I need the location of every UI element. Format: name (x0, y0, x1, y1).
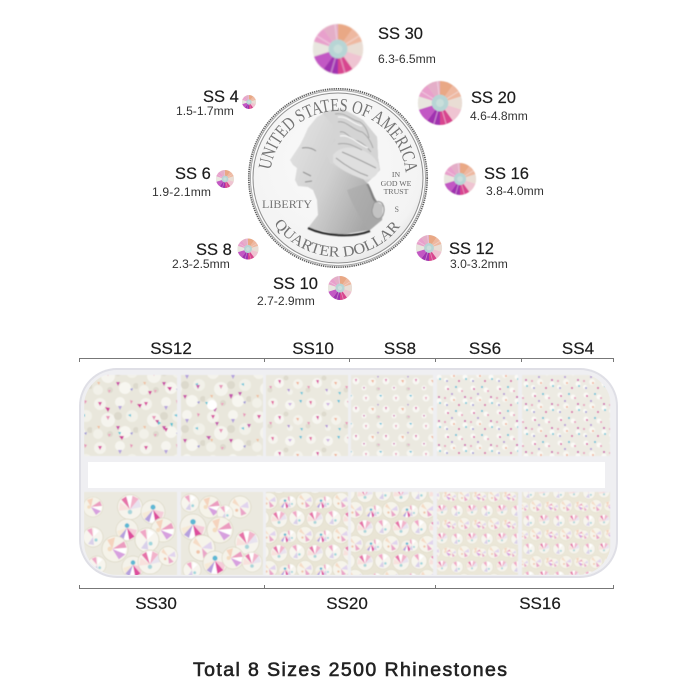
size item: SS 6: 1.9-2.1mm (152, 185, 211, 199)
size item: SS 20 (418, 81, 528, 125)
coin legend: Quarter Dollar: QUARTER DOLLAR (276, 220, 400, 257)
size item: SS 8 (172, 238, 259, 271)
size item: SS 16: 3.8-4.0mm (486, 184, 544, 198)
size item: SS 10: SS 10 (273, 275, 318, 293)
bottom bracket with labels (80, 585, 614, 613)
size item: SS 16 (444, 163, 544, 198)
size item: SS 12 (416, 235, 508, 271)
bottom bracket with labels: SS30 (135, 594, 177, 613)
size item: SS 30 (313, 24, 436, 74)
size item: SS 4: 1.5-1.7mm (176, 104, 234, 118)
size item: SS 12: 3.0-3.2mm (450, 257, 508, 271)
coin motto: GOD WE (381, 179, 412, 188)
white slot in tray (88, 462, 605, 488)
size item: SS 16: SS 16 (484, 165, 529, 183)
infographic: rhinestone size chart (79, 23, 618, 676)
title: Total 8 Sizes 2500 Rhinestones (193, 659, 507, 681)
size item: SS 8: SS 8 (196, 241, 232, 259)
size item: SS 6 (152, 165, 234, 199)
size item: SS 6: SS 6 (175, 165, 211, 183)
size item: SS 4: SS 4 (203, 88, 239, 106)
size item: SS 12: SS 12 (449, 240, 494, 258)
top bracket with labels: SS10 (292, 339, 334, 358)
coin: quarter dollar (248, 88, 428, 268)
top bracket with labels: SS8 (384, 339, 416, 358)
coin legend: Liberty: LIBERTY (262, 197, 312, 211)
coin motto: IN (392, 170, 400, 179)
bottom bracket with labels: SS20 (326, 594, 368, 613)
size item: SS 20: SS 20 (471, 89, 516, 107)
size item: SS 30: 6.3-6.5mm (378, 52, 436, 66)
coin mint mark: S (394, 205, 399, 214)
top bracket with labels: SS6 (469, 339, 501, 358)
coin portrait (290, 109, 384, 235)
size item: SS 8: 2.3-2.5mm (172, 257, 230, 271)
top bracket with labels: SS4 (562, 339, 594, 358)
size item: SS 30: SS 30 (378, 25, 423, 43)
size item: SS 4 (176, 88, 256, 118)
size item: SS 10 (257, 275, 352, 308)
size item: SS 20: 4.6-4.8mm (470, 109, 528, 123)
size item: SS 10: 2.7-2.9mm (257, 294, 315, 308)
coin legend: United States of America: UNITED STATES OF AMERICA (258, 98, 418, 173)
bottom bracket with labels: SS16 (519, 594, 561, 613)
coin motto: TRUST (384, 187, 409, 196)
top bracket with labels: SS12 (150, 339, 192, 358)
tray compartments (83, 375, 610, 579)
top bracket with labels (80, 339, 614, 362)
rhinestone storage tray (79, 368, 618, 579)
